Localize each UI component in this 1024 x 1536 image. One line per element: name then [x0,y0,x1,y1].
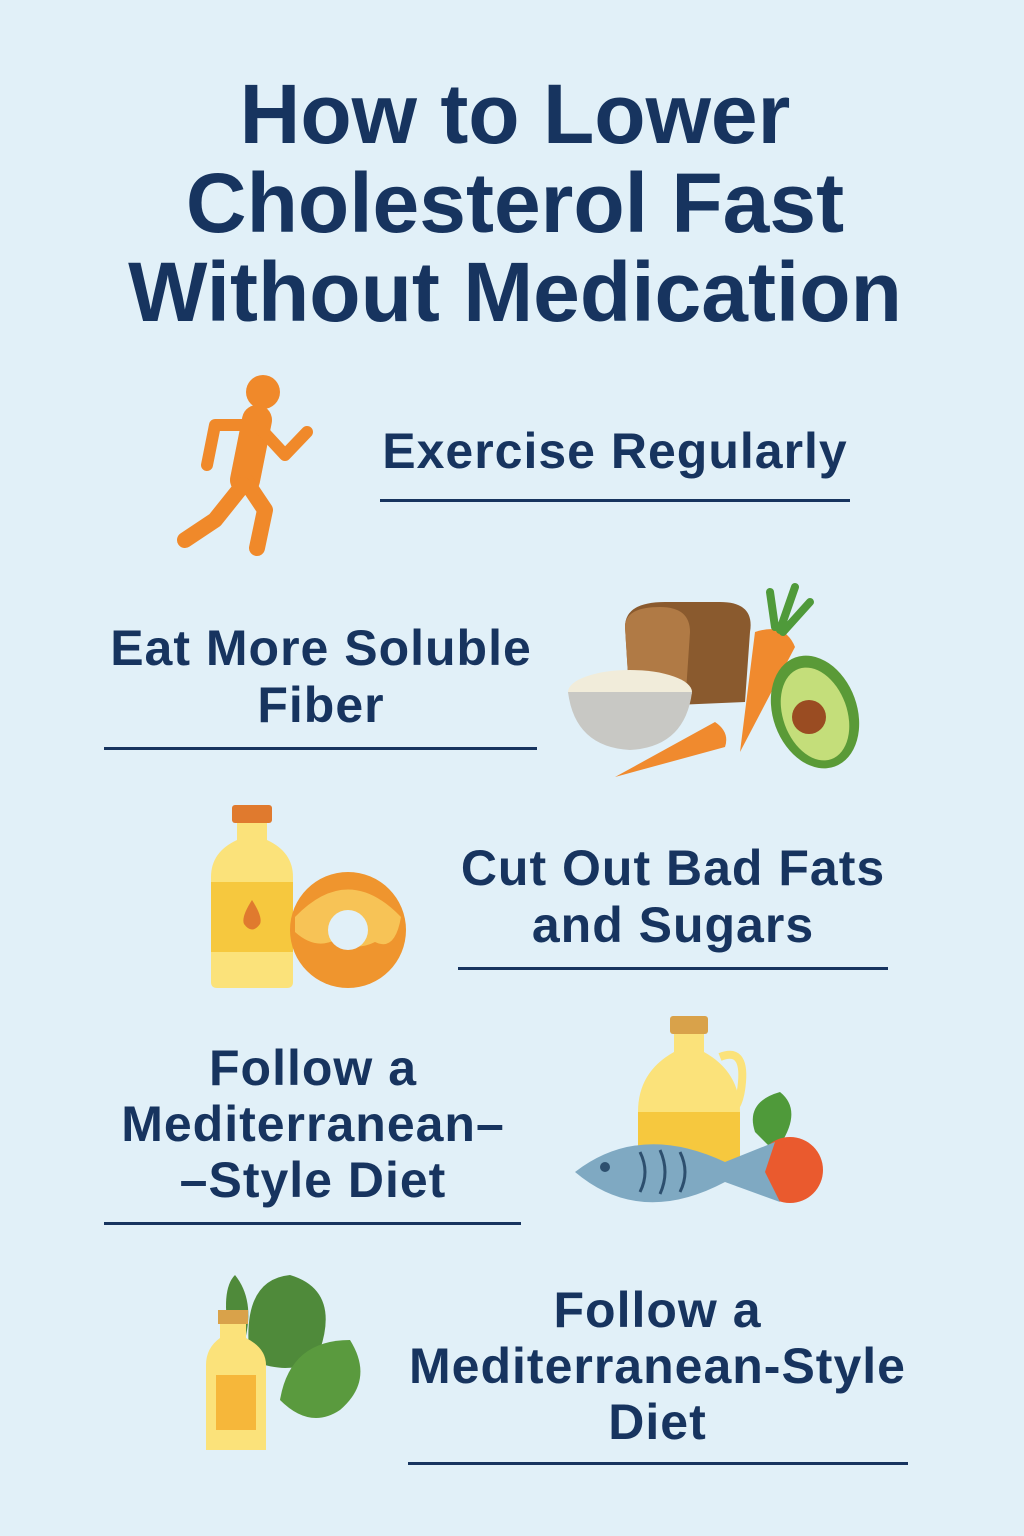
heading: mediterranean 1 [121,1040,505,1208]
heading: mediterranean 2: Mediterranean-Style [409,1338,906,1394]
icon: oil, fish, tomato [575,1016,823,1203]
heading: mediterranean 2: Follow a [554,1282,762,1338]
heading: soluble fiber: Fiber [257,677,385,733]
icon: fiber foods [568,583,860,777]
heading: bad fats [461,840,885,953]
heading: mediterranean 2 [409,1282,906,1450]
heading: soluble fiber: Eat More Soluble [110,620,532,676]
heading: bad fats: and Sugars [532,897,814,953]
heading: Exercise Regularly: Exercise Regularly [382,423,848,479]
heading: bad fats: Cut Out Bad Fats [461,840,885,896]
heading: soluble fiber [110,620,532,733]
title: Without Medication [128,245,902,339]
heading: mediterranean 1: Mediterranean– [121,1096,505,1152]
title: How to Lower [240,67,790,161]
heading: mediterranean 1: –Style Diet [180,1152,446,1208]
icon: runner [177,375,313,556]
icon: oil bottle and donut [211,805,406,988]
icon: leaves and oil bottle [206,1275,360,1450]
title [128,67,902,339]
title: Cholesterol Fast [186,156,844,250]
heading: mediterranean 1: Follow a [209,1040,417,1096]
heading: mediterranean 2: Diet [608,1394,707,1450]
